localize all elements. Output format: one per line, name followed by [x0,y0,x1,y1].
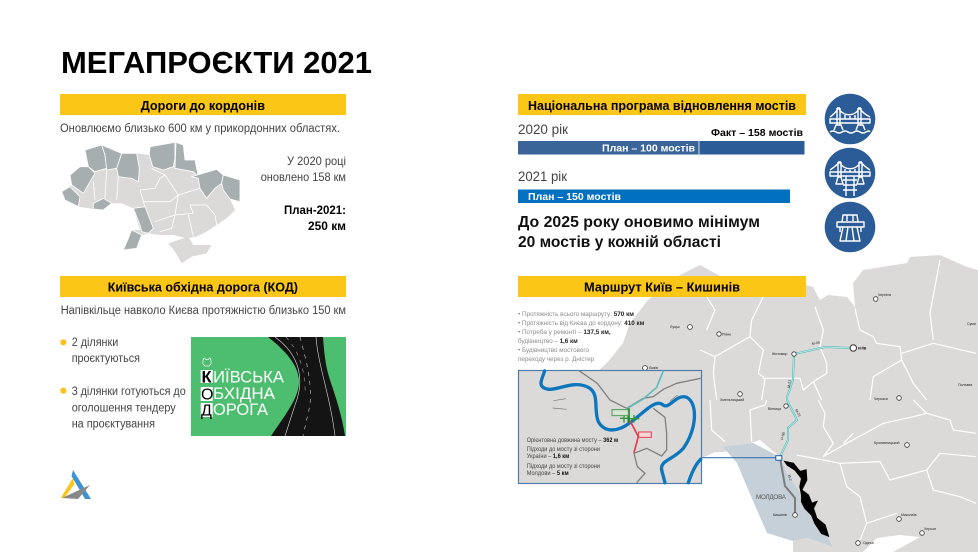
text: 2021 plan: 250 км [308,221,346,233]
region: Moldova [723,443,833,547]
text: 2020 result: У 2020 році [287,154,346,168]
icon: highway overpass [825,202,875,252]
city labels: МОЛДОВА [756,494,787,501]
heading bar: Національна програма відновлення мостів [528,98,796,113]
heading bar: Дороги до кордонів [141,98,265,113]
crossing: bridge [620,408,639,423]
city labels: Житомир [772,352,787,356]
city labels: Херсон [924,527,936,531]
inset: bridge crossing map [518,370,702,484]
text: 2020 result [261,154,346,184]
map: route across Ukraine and Moldova [597,255,978,552]
image: KOD road banner: ИЇВСЬКА [213,368,285,386]
text: 2021 plan: План-2021: [284,205,346,217]
callout: 2025 goal [518,214,760,251]
bar: 2021: План – 150 мостів [528,191,622,203]
river: Dniester [785,462,828,536]
heading bar [60,94,346,115]
bar: 2021 [518,190,790,203]
icon: bridge over railway [825,148,875,198]
label: fact 158: Факт – 158 мостів [711,127,804,139]
city labels: Миколаїв [901,513,917,517]
route facts: • Протяжність від Києва до кордону: 410 км [518,321,645,327]
city labels: Рівне [722,332,731,336]
image: KOD road banner: К [202,368,212,386]
image: KOD road banner: Д [201,402,212,420]
route facts: • Протяжність всього маршруту: 570 км [518,312,635,318]
city labels: Р-08 [780,432,786,440]
route: border to Chisinau [780,458,795,515]
label: 2020: 2020 рік [518,121,569,137]
heading bar [518,276,806,297]
bar: 2020: План – 100 мостів [602,142,696,154]
city labels [649,293,976,545]
map: Ukraine oblasts [62,142,240,263]
image: KOD road banner: БХІДНА [213,384,276,403]
heading bar [518,94,806,115]
river [541,371,701,483]
cities [643,297,924,545]
panel: Kyiv-Chisinau route [518,276,806,484]
bullet: three sections: на проєктування [72,418,155,430]
city labels: М-21 [794,408,802,418]
text: 2020 result: оновлено 158 км [261,170,346,184]
panel: roads to borders [60,94,346,263]
route facts: • Будівництво мостового [518,348,590,354]
callout: 2025 goal: До 2025 року оновимо мінімум [518,214,760,231]
bullet: two sections: проєктуються [72,353,140,365]
city labels: Одеса [863,541,874,545]
city labels: КИЇВ [858,346,867,350]
callout: 2025 goal: 20 мостів у кожній області [518,234,721,251]
bullet: two sections: 2 ділянки [72,337,118,349]
text: 2021 plan [284,205,346,233]
city labels: Суми [967,322,976,326]
icon: suspension bridge over water [825,94,875,144]
route: Kyiv to border [780,347,853,457]
city labels: Кишинів [773,513,787,517]
city labels: Кропивницький [874,441,899,445]
image: KOD road banner: ОРОГА [213,400,269,419]
icon: cat logo [203,358,211,366]
inset text: Орієнтовна довжина мосту – 362 м [527,438,619,444]
city labels: Луцьк [670,325,680,329]
city labels: Хмельницький [720,398,744,402]
panel: Kyiv ring road [60,276,346,436]
route facts [518,312,645,363]
logo [60,470,91,499]
city labels: Вінниця [768,407,781,411]
city labels: Львів [649,366,658,370]
subtitle: Напівкільце навколо Києва протяжністю близько 150 км [61,305,346,317]
heading bar: Маршрут Київ – Кишинів [584,280,740,294]
title: МЕГАПРОЄКТИ 2021 [61,45,372,80]
route facts: переходу через р. Дністер [518,357,595,363]
city labels: М-21 [787,380,792,388]
bullet: three sections: оголошення тендеру [72,402,176,414]
subtitle: Оновлюємо близько 600 км у прикордонних областях. [60,123,340,135]
inset text: України – 1,6 км [527,454,570,460]
heading bar: Київська обхідна дорога (КОД) [108,280,298,294]
panel: national bridge programme [518,94,806,251]
bullet: three sections [60,386,186,430]
inset text: Молдови – 5 км [527,471,569,477]
city labels: Чернігів [878,293,891,297]
connector line [702,456,782,460]
city labels: Полтава [958,383,972,387]
label: 2021: 2021 рік [518,168,568,184]
image: KOD road banner: О [201,386,213,404]
image: KOD road banner [191,337,346,436]
inset text: Підходи до мосту зі сторони [527,464,600,470]
bullet: two sections [60,337,140,365]
bar: 2020 [518,140,804,156]
roads [579,371,701,483]
bullet: three sections: 3 ділянки готуються до [72,386,186,398]
route facts: будівництво – 1,6 км [518,339,578,345]
city labels: Черкаси [874,397,888,401]
heading bar [60,276,346,297]
inset text [527,438,619,477]
city labels: М-06 [811,341,820,346]
inset text: Підходи до мосту зі сторони [527,447,600,453]
crossing: new road [630,421,638,453]
city labels: М-2 [787,474,793,481]
route facts: • Потреба у ремонті – 137,5 км, [518,330,611,336]
